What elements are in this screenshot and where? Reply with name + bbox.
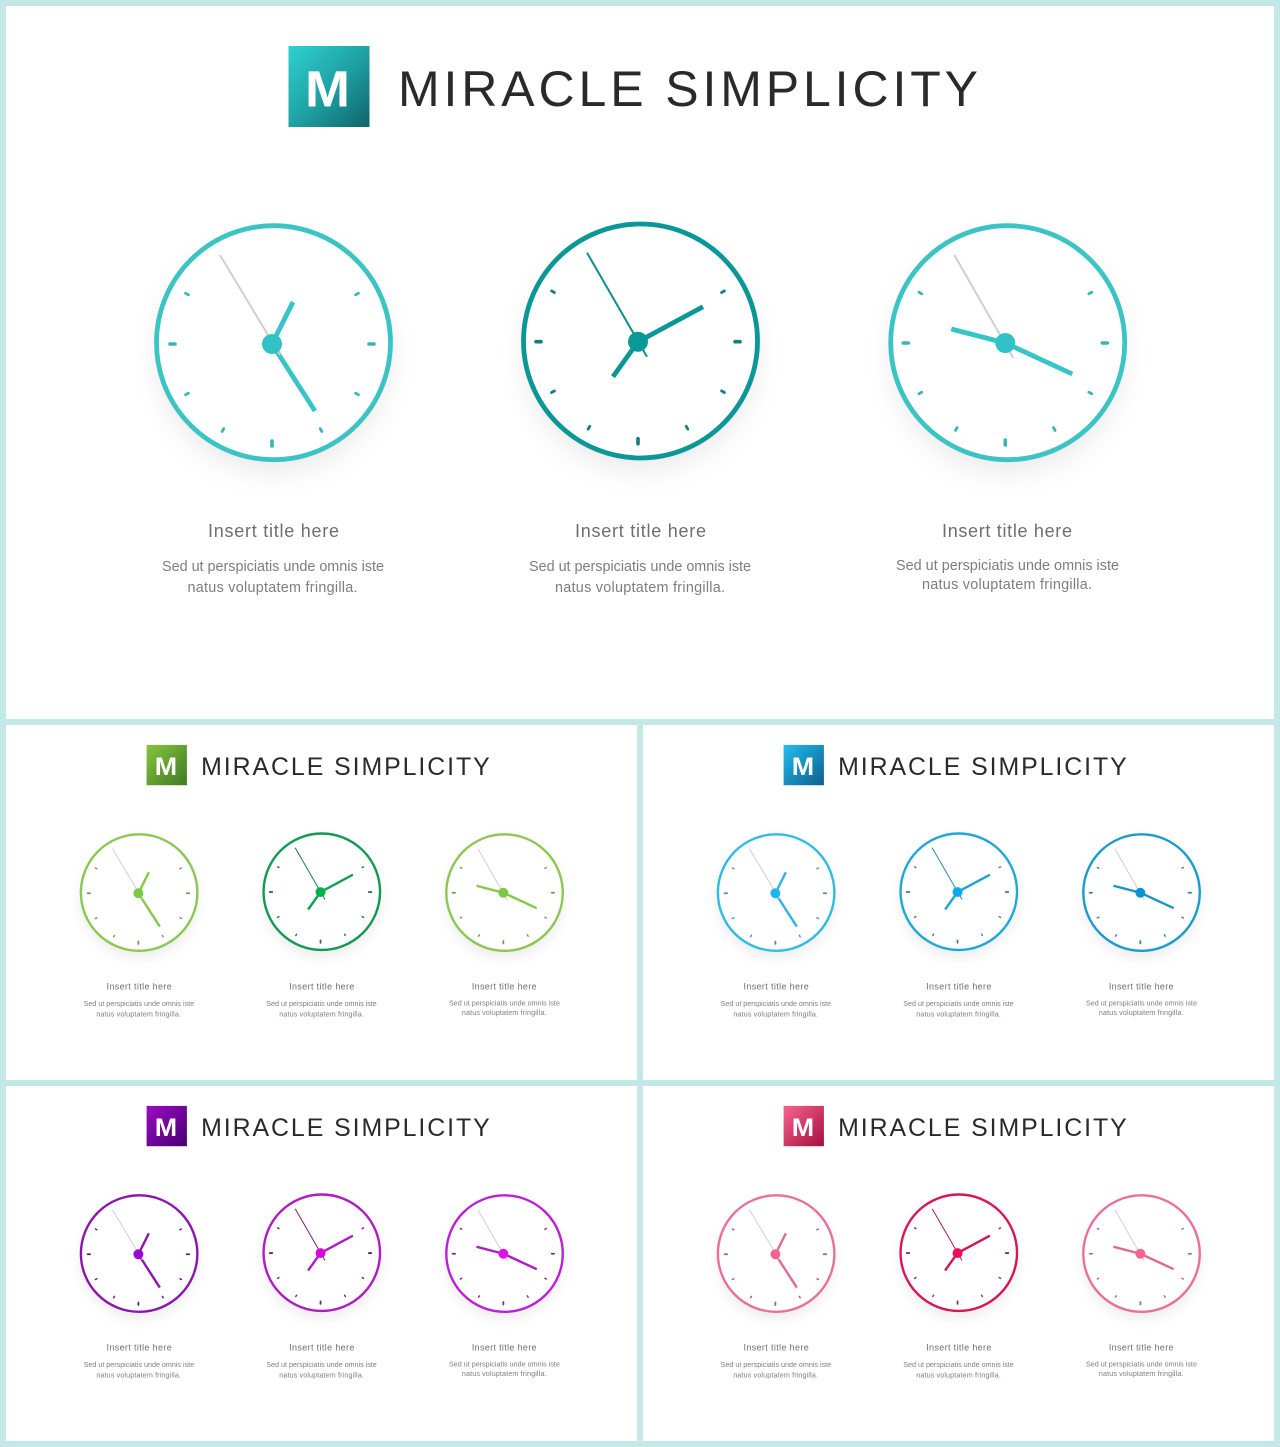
- logo: blue M: M: [792, 753, 814, 781]
- clock 3 description: [1086, 1361, 1197, 1378]
- clock 3 title: Insert title here: [1109, 1342, 1174, 1352]
- clock 1 description: Sed ut perspiciatis unde omnis iste: [84, 1000, 194, 1008]
- clock 2 description: [903, 1361, 1014, 1380]
- clock 1 description: Sed ut perspiciatis unde omnis iste: [721, 1361, 831, 1369]
- clock 1 title: Insert title here: [107, 1342, 172, 1352]
- clock 2 description: [266, 1361, 377, 1380]
- clock 2 description: natus voluptatem fringilla.: [279, 1372, 364, 1380]
- clock 2: [264, 1194, 380, 1311]
- clock 1: [156, 226, 390, 460]
- clock 2 description: Sed ut perspiciatis unde omnis iste: [266, 1361, 377, 1369]
- clock 1: [81, 834, 197, 951]
- logo: purple M: M: [155, 1114, 177, 1142]
- logo: teal M: [288, 46, 370, 127]
- clock 2: [264, 833, 380, 950]
- heading: MIRACLE SIMPLICITY: [201, 1114, 490, 1142]
- clock 1 description: natus voluptatem fringilla.: [188, 580, 358, 596]
- clock 1: [718, 834, 834, 951]
- clock 3: [1083, 834, 1200, 951]
- clock 2 description: natus voluptatem fringilla.: [916, 1372, 1001, 1380]
- clock 2 title: Insert title here: [926, 1342, 991, 1352]
- clock 2 description: [529, 559, 751, 596]
- clock 2 description: natus voluptatem fringilla.: [279, 1011, 364, 1019]
- clock 3: [1083, 1195, 1200, 1312]
- clock 2 description: natus voluptatem fringilla.: [555, 580, 725, 596]
- clock 3 description: [896, 558, 1119, 593]
- clock 2 title: Insert title here: [289, 1342, 354, 1352]
- logo: blue M: [784, 745, 824, 785]
- clock 3 description: Sed ut perspiciatis unde omnis iste: [449, 1361, 560, 1369]
- clock 1 description: natus voluptatem fringilla.: [96, 1372, 181, 1380]
- clock 1 description: Sed ut perspiciatis unde omnis iste: [721, 1000, 831, 1008]
- clock 1 description: Sed ut perspiciatis unde omnis iste: [84, 1361, 194, 1369]
- clock 3 title: Insert title here: [472, 981, 537, 991]
- clock 3 description: natus voluptatem fringilla.: [922, 577, 1092, 593]
- clock 3 description: [449, 1000, 560, 1017]
- clock 1 title: Insert title here: [744, 1342, 809, 1352]
- clock 2 description: Sed ut perspiciatis unde omnis iste: [529, 559, 751, 575]
- clock 2: [901, 833, 1017, 950]
- clock 1 title: Insert title here: [208, 521, 339, 541]
- clock 3: [446, 1195, 563, 1312]
- clock 3 description: Sed ut perspiciatis unde omnis iste: [449, 1000, 560, 1008]
- panel: teal slide: [6, 6, 1274, 719]
- clock 3 description: natus voluptatem fringilla.: [462, 1370, 547, 1378]
- clock 1 title: Insert title here: [744, 981, 809, 991]
- clock 3 title: Insert title here: [472, 1342, 537, 1352]
- heading: MIRACLE SIMPLICITY: [838, 753, 1127, 781]
- clock 3: [891, 226, 1125, 460]
- clock 3 description: Sed ut perspiciatis unde omnis iste: [896, 558, 1119, 574]
- clock 3 description: [449, 1361, 560, 1378]
- clock 1 description: [84, 1361, 194, 1380]
- panel: blue slide: [643, 725, 1274, 1080]
- clock 2 description: Sed ut perspiciatis unde omnis iste: [903, 1000, 1014, 1008]
- panel: purple slide: [6, 1086, 637, 1441]
- clock 2 description: Sed ut perspiciatis unde omnis iste: [266, 1000, 377, 1008]
- clock 2 title: Insert title here: [926, 981, 991, 991]
- clock 3 description: Sed ut perspiciatis unde omnis iste: [1086, 1000, 1197, 1008]
- clock 1 description: [721, 1361, 831, 1380]
- clock 1: [81, 1195, 197, 1312]
- clock 2 description: [903, 1000, 1014, 1019]
- clock 2 title: Insert title here: [289, 981, 354, 991]
- clock 2 title: Insert title here: [575, 521, 706, 541]
- clock 3 title: Insert title here: [942, 521, 1072, 541]
- clock 1 description: natus voluptatem fringilla.: [733, 1011, 818, 1019]
- panel: pink slide: [643, 1086, 1274, 1441]
- clock 2 description: natus voluptatem fringilla.: [916, 1011, 1001, 1019]
- clock 2: [901, 1194, 1017, 1311]
- logo: green M: [147, 745, 187, 785]
- logo: green M: M: [155, 753, 177, 781]
- clock 2: [524, 224, 758, 458]
- clock 3 description: Sed ut perspiciatis unde omnis iste: [1086, 1361, 1197, 1369]
- clock 3 description: natus voluptatem fringilla.: [1099, 1370, 1184, 1378]
- clock 3 title: Insert title here: [1109, 981, 1174, 991]
- logo: teal M: M: [305, 60, 350, 118]
- clock 3 description: natus voluptatem fringilla.: [462, 1009, 547, 1017]
- clock 1 description: Sed ut perspiciatis unde omnis iste: [162, 559, 384, 575]
- clock 3 description: [1086, 1000, 1197, 1017]
- clock 1 description: [721, 1000, 831, 1019]
- clock 2 description: [266, 1000, 377, 1019]
- clock 1 title: Insert title here: [107, 981, 172, 991]
- logo: purple M: [147, 1106, 187, 1146]
- panel: green slide: [6, 725, 637, 1080]
- clock 1 description: [84, 1000, 194, 1019]
- clock 3 description: natus voluptatem fringilla.: [1099, 1009, 1184, 1017]
- clock 2 description: Sed ut perspiciatis unde omnis iste: [903, 1361, 1014, 1369]
- clock 3: [446, 834, 563, 951]
- heading: MIRACLE SIMPLICITY: [838, 1114, 1127, 1142]
- clock 1 description: natus voluptatem fringilla.: [733, 1372, 818, 1380]
- clock 1: [718, 1195, 834, 1312]
- logo: pink M: M: [792, 1114, 814, 1142]
- heading: MIRACLE SIMPLICITY: [398, 61, 978, 117]
- clock 1 description: [162, 559, 384, 596]
- logo: pink M: [784, 1106, 824, 1146]
- clock 1 description: natus voluptatem fringilla.: [96, 1011, 181, 1019]
- heading: MIRACLE SIMPLICITY: [201, 753, 490, 781]
